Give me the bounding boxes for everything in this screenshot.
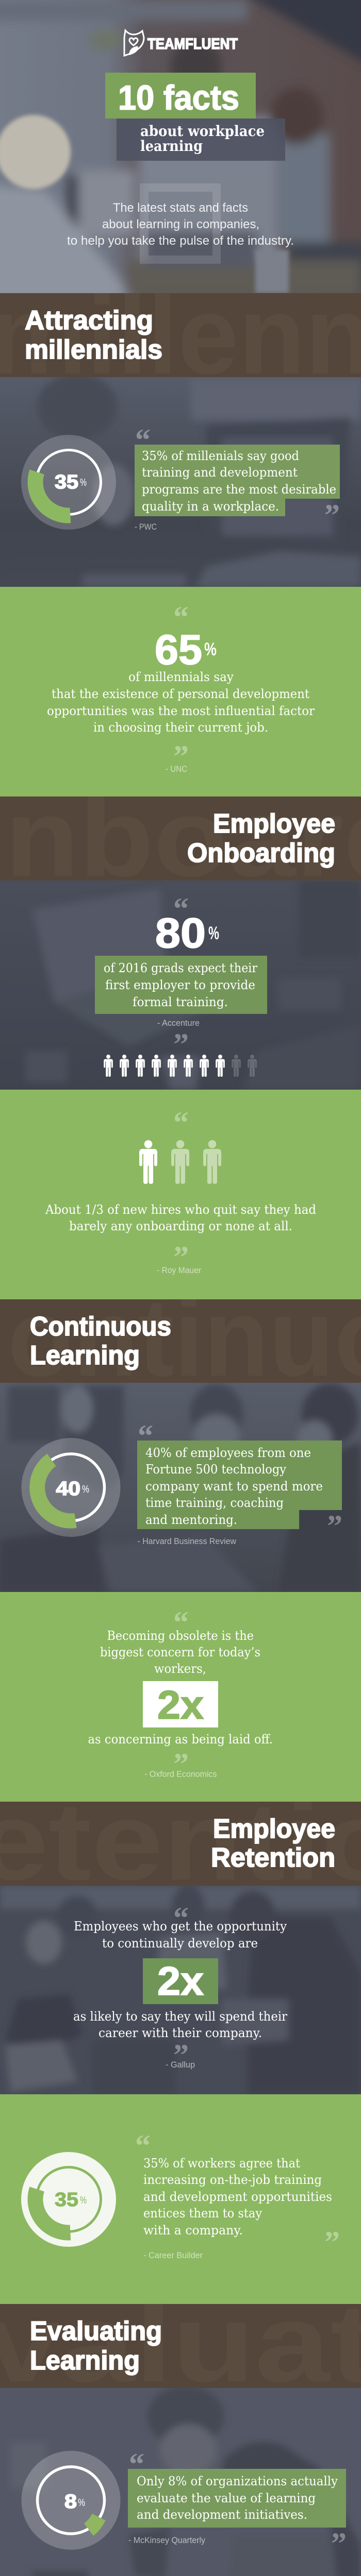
source: - UNC — [166, 765, 187, 774]
callout: Fortune 500 technology — [145, 1462, 286, 1477]
close quote: ” — [173, 1747, 189, 1781]
panel: section heading attracting millennials — [0, 293, 361, 377]
quote text top — [100, 1629, 260, 1676]
heading: Evaluating — [30, 2316, 162, 2346]
donut chart: 35% — [21, 2152, 116, 2247]
quote text: increasing on-the-job training — [143, 2173, 322, 2187]
stat number: 65 — [155, 626, 202, 673]
panel: section heading evaluating learning — [0, 2304, 361, 2388]
quote text top: Employees who get the opportunity — [74, 1919, 287, 1934]
panel: section heading employee onboarding — [0, 796, 361, 880]
band background — [0, 1802, 361, 1886]
quote text top: Becoming obsolete is the — [107, 1629, 254, 1643]
quote text: in choosing their current job. — [93, 720, 268, 735]
quote text top: to continually develop are — [102, 1936, 258, 1951]
pictogram: eight of ten people — [104, 1055, 257, 1077]
callout: company want to spend more — [145, 1479, 323, 1494]
close quote: ” — [173, 1240, 189, 1274]
source: - PWC — [135, 522, 157, 532]
donut chart: 40%: 40 — [56, 1478, 80, 1500]
callout: time training, coaching — [145, 1496, 284, 1510]
donut chart: 35% — [21, 435, 116, 530]
heading: Attracting — [25, 306, 153, 335]
quote text bottom — [73, 2009, 287, 2040]
band background — [0, 1299, 361, 1383]
open quote: “ — [138, 1419, 153, 1453]
donut chart: 8%: 8 — [64, 2491, 77, 2513]
heading — [30, 2316, 162, 2376]
heading — [211, 1814, 335, 1873]
heading: Employee — [213, 1814, 335, 1844]
open quote: “ — [135, 423, 151, 457]
callout: training and development — [142, 465, 298, 480]
donut chart: 35%: 35 — [55, 2189, 78, 2211]
quote text: barely any onboarding or none at all. — [69, 1219, 292, 1233]
open quote: “ — [173, 1106, 189, 1140]
photo background — [0, 2385, 361, 2576]
heading: millennials — [25, 335, 162, 365]
source: - Career Builder — [143, 2251, 203, 2260]
callout: first employer to provide — [105, 978, 255, 992]
quote text: with a company. — [143, 2223, 243, 2238]
stat box: 2x — [143, 1958, 218, 2004]
intro text: The latest stats and facts — [113, 201, 248, 215]
quote text: and development opportunities — [143, 2190, 332, 2204]
quote text — [45, 1202, 316, 1233]
open quote: “ — [173, 892, 189, 926]
close quote: ” — [173, 2038, 189, 2072]
open quote: “ — [173, 1605, 189, 1639]
callout — [95, 956, 267, 1014]
heading — [25, 306, 162, 365]
stat box: 2x — [143, 1681, 218, 1727]
callout: programs are the most desirable — [142, 482, 336, 497]
open quote: “ — [135, 2129, 151, 2163]
quote text bottom: career with their company. — [99, 2026, 262, 2040]
panel: millennials photo stat — [0, 377, 361, 587]
quote text bottom: as likely to say they will spend their — [73, 2009, 287, 2024]
stat number: 80 — [155, 910, 206, 957]
subtitle box: learning — [140, 138, 203, 155]
quote text top: workers, — [154, 1662, 206, 1676]
heading — [30, 1312, 171, 1370]
panel: section heading continuous learning — [8, 1299, 361, 1383]
callout: evaluate the value of learning — [137, 2491, 316, 2505]
photo background — [0, 1383, 361, 1592]
donut chart: 35%: 35 — [55, 471, 78, 493]
donut chart: 8% — [22, 2451, 121, 2550]
intro text — [67, 201, 294, 248]
source: - Oxford Economics — [144, 1770, 217, 1779]
open quote: “ — [129, 2447, 144, 2481]
panel: 80% photo stat — [0, 880, 361, 1090]
close quote: ” — [327, 1509, 342, 1543]
stat number: % — [208, 923, 219, 943]
source: - Gallup — [166, 2060, 195, 2070]
heading: Continuous — [30, 1312, 171, 1342]
panel: retention photo stat — [0, 1886, 361, 2094]
heading: Employee — [213, 809, 335, 839]
quote text: About 1/3 of new hires who quit say they had — [45, 1202, 316, 1217]
stat box: 2x: 2x — [157, 1682, 204, 1727]
donut chart: 40% — [22, 1438, 121, 1537]
callout: and development initiatives. — [137, 2507, 307, 2522]
source: - McKinsey Quarterly — [128, 2536, 206, 2545]
panel: one third quote — [0, 1090, 361, 1299]
panel: section heading employee retention — [0, 1802, 361, 1886]
quote text — [143, 2156, 332, 2238]
close quote: ” — [324, 498, 340, 532]
quote text top — [74, 1919, 287, 1951]
panel: 2x obsolete quote — [0, 1592, 361, 1802]
photo background — [0, 1886, 361, 2094]
quote text: 35% of workers agree that — [143, 2156, 300, 2171]
panel: hero — [0, 0, 361, 293]
quote text: entices them to stay — [143, 2206, 262, 2221]
quote text: that the existence of personal development — [52, 687, 309, 701]
callout — [135, 445, 340, 516]
close quote: ” — [324, 2225, 340, 2259]
panel: 8% photo stat — [0, 2388, 361, 2576]
band background — [0, 2304, 361, 2388]
panel: 65% quote — [0, 587, 361, 796]
intro text: about learning in companies, — [102, 217, 259, 231]
donut chart: 40%: % — [82, 1484, 89, 1495]
stat number: % — [204, 639, 217, 659]
heading: Learning — [30, 2346, 140, 2376]
title box: 10 facts: 10 facts — [118, 78, 239, 117]
open quote: “ — [173, 600, 189, 634]
photo background — [0, 880, 361, 1090]
photo background — [0, 374, 361, 587]
callout: Only 8% of organizations actually — [137, 2474, 338, 2488]
callout: 40% of employees from one — [145, 1446, 311, 1460]
donut chart: 35%: % — [80, 2195, 87, 2206]
heading: Retention — [211, 1843, 335, 1873]
quote text top: biggest concern for today’s — [100, 1645, 260, 1659]
open quote: “ — [173, 1901, 189, 1935]
subtitle box — [117, 118, 285, 161]
quote text: opportunities was the most influential factor — [47, 704, 315, 718]
hero photo background — [0, 0, 361, 299]
source: - Accenture — [157, 1019, 200, 1028]
heading — [187, 809, 335, 868]
band background — [0, 796, 361, 880]
decorative frame behind intro — [140, 183, 221, 264]
source: - Roy Mauer — [157, 1266, 201, 1275]
logo wordmark: TEAMFLUENT — [147, 36, 238, 53]
callout — [128, 2469, 346, 2528]
quote text bottom: as concerning as being laid off. — [88, 1732, 273, 1747]
callout: 35% of millenials say good — [142, 449, 299, 463]
close quote: ” — [331, 2527, 347, 2561]
close quote: ” — [173, 1027, 189, 1061]
intro text: to help you take the pulse of the industry. — [67, 234, 294, 248]
quote text — [47, 670, 315, 735]
band background — [0, 293, 361, 377]
heading: Onboarding — [187, 838, 335, 868]
callout — [137, 1440, 342, 1529]
callout: of 2016 grads expect their — [104, 961, 257, 975]
callout: formal training. — [133, 995, 228, 1009]
logo: Teamfluent owl — [124, 30, 144, 56]
panel: 35% workers quote — [0, 2094, 361, 2304]
donut chart: 35%: % — [80, 477, 87, 488]
stat box: 2x: 2x — [157, 1958, 204, 2004]
donut chart: 8%: % — [78, 2497, 85, 2509]
callout: and mentoring. — [145, 1513, 237, 1527]
pictogram: one of three people — [139, 1140, 221, 1184]
subtitle box: about workplace — [140, 123, 265, 140]
close quote: ” — [173, 739, 189, 773]
callout: quality in a workplace. — [142, 499, 279, 514]
source: - Harvard Business Review — [137, 1537, 236, 1546]
quote text: of millennials say — [128, 670, 234, 684]
heading: Learning — [30, 1341, 140, 1370]
panel: 40% photo stat — [0, 1383, 361, 1592]
